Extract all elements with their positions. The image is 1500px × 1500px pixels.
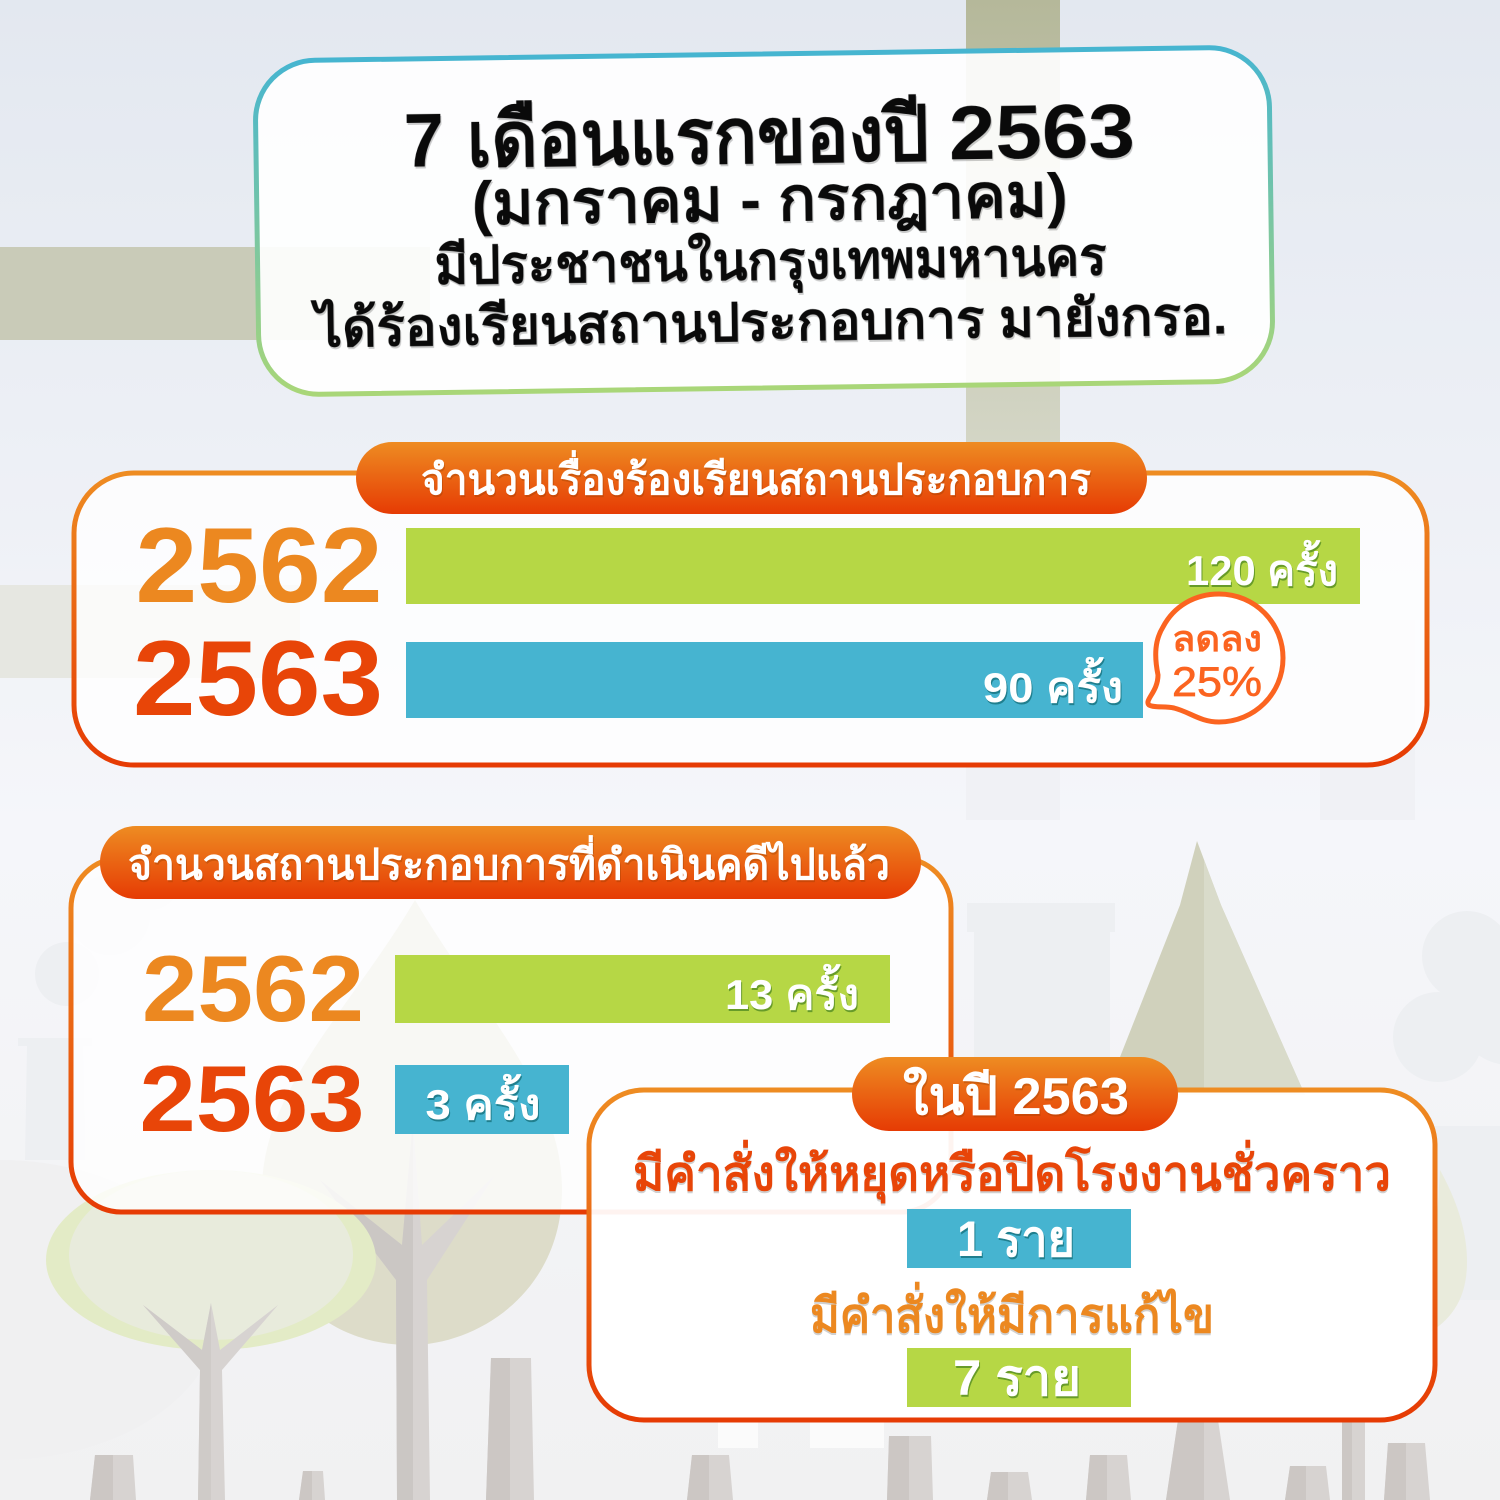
bar 2563: 90 ครั้ง bbox=[983, 656, 1123, 711]
bar 2562 bbox=[406, 528, 1360, 604]
ghost factories and smoke bbox=[18, 620, 1500, 1300]
panel: prosecutions bbox=[71, 826, 951, 1212]
bar 2563 bbox=[395, 1065, 569, 1134]
correction count bbox=[907, 1348, 1131, 1407]
title line 3: มีประชาชนในกรุงเทพมหานคร bbox=[434, 226, 1107, 299]
correction count: 7 ราย bbox=[953, 1350, 1081, 1406]
prosecutions heading: จำนวนสถานประกอบการที่ดำเนินคดีไปแล้ว bbox=[128, 835, 890, 888]
orders heading: ในปี 2563 bbox=[903, 1066, 1129, 1126]
panel: complaints bbox=[74, 442, 1427, 765]
tree cone right bbox=[1105, 841, 1305, 1095]
title line 2: (มกราคม - กรกฎาคม) bbox=[471, 162, 1068, 237]
complaints heading: จำนวนเรื่องร้องเรียนสถานประกอบการ bbox=[421, 450, 1091, 503]
white ghost blocks bbox=[718, 1420, 884, 1448]
callout: down 25% bbox=[1148, 594, 1283, 722]
orders heading bbox=[852, 1057, 1178, 1131]
hill bbox=[0, 1160, 220, 1460]
right pale tree bbox=[1430, 1170, 1467, 1332]
panel: orders in 2563 bbox=[589, 1057, 1435, 1420]
complaints heading bbox=[356, 442, 1147, 514]
bar 2563: 3 ครั้ง bbox=[426, 1073, 540, 1128]
callout: down 25%: ลดลง bbox=[1172, 618, 1262, 659]
year 2562: 2562 bbox=[136, 505, 382, 625]
year 2563: 2563 bbox=[140, 1046, 364, 1151]
chimneys bbox=[90, 1358, 1430, 1500]
year 2562: 2562 bbox=[142, 936, 364, 1041]
title line 4: ได้ร้องเรียนสถานประกอบการ มายังกรอ. bbox=[310, 286, 1228, 358]
bar 2562 bbox=[395, 955, 890, 1023]
closure count: 1 ราย bbox=[957, 1211, 1075, 1267]
bar 2563 bbox=[406, 642, 1143, 718]
title line 1: 7 bbox=[403, 98, 444, 184]
panel: title bbox=[255, 47, 1273, 395]
bar 2562: 13 ครั้ง bbox=[725, 963, 859, 1018]
closure count bbox=[907, 1209, 1131, 1268]
tree left bbox=[46, 1170, 376, 1350]
correction text: มีคำสั่งให้มีการแก้ไข bbox=[810, 1281, 1214, 1343]
tree center bbox=[262, 900, 562, 1345]
title line 1 bbox=[403, 89, 1135, 184]
callout: down 25%: 25% bbox=[1172, 658, 1262, 705]
title line 1: 2563 bbox=[948, 89, 1135, 176]
title line 1: เดือนแรกของปี bbox=[466, 92, 929, 183]
prosecutions heading bbox=[100, 826, 921, 899]
year 2563: 2563 bbox=[133, 618, 383, 738]
temporary closure text: มีคำสั่งให้หยุดหรือปิดโรงงานชั่วคราว bbox=[633, 1139, 1391, 1204]
bar 2562: 120 ครั้ง bbox=[1186, 539, 1338, 594]
